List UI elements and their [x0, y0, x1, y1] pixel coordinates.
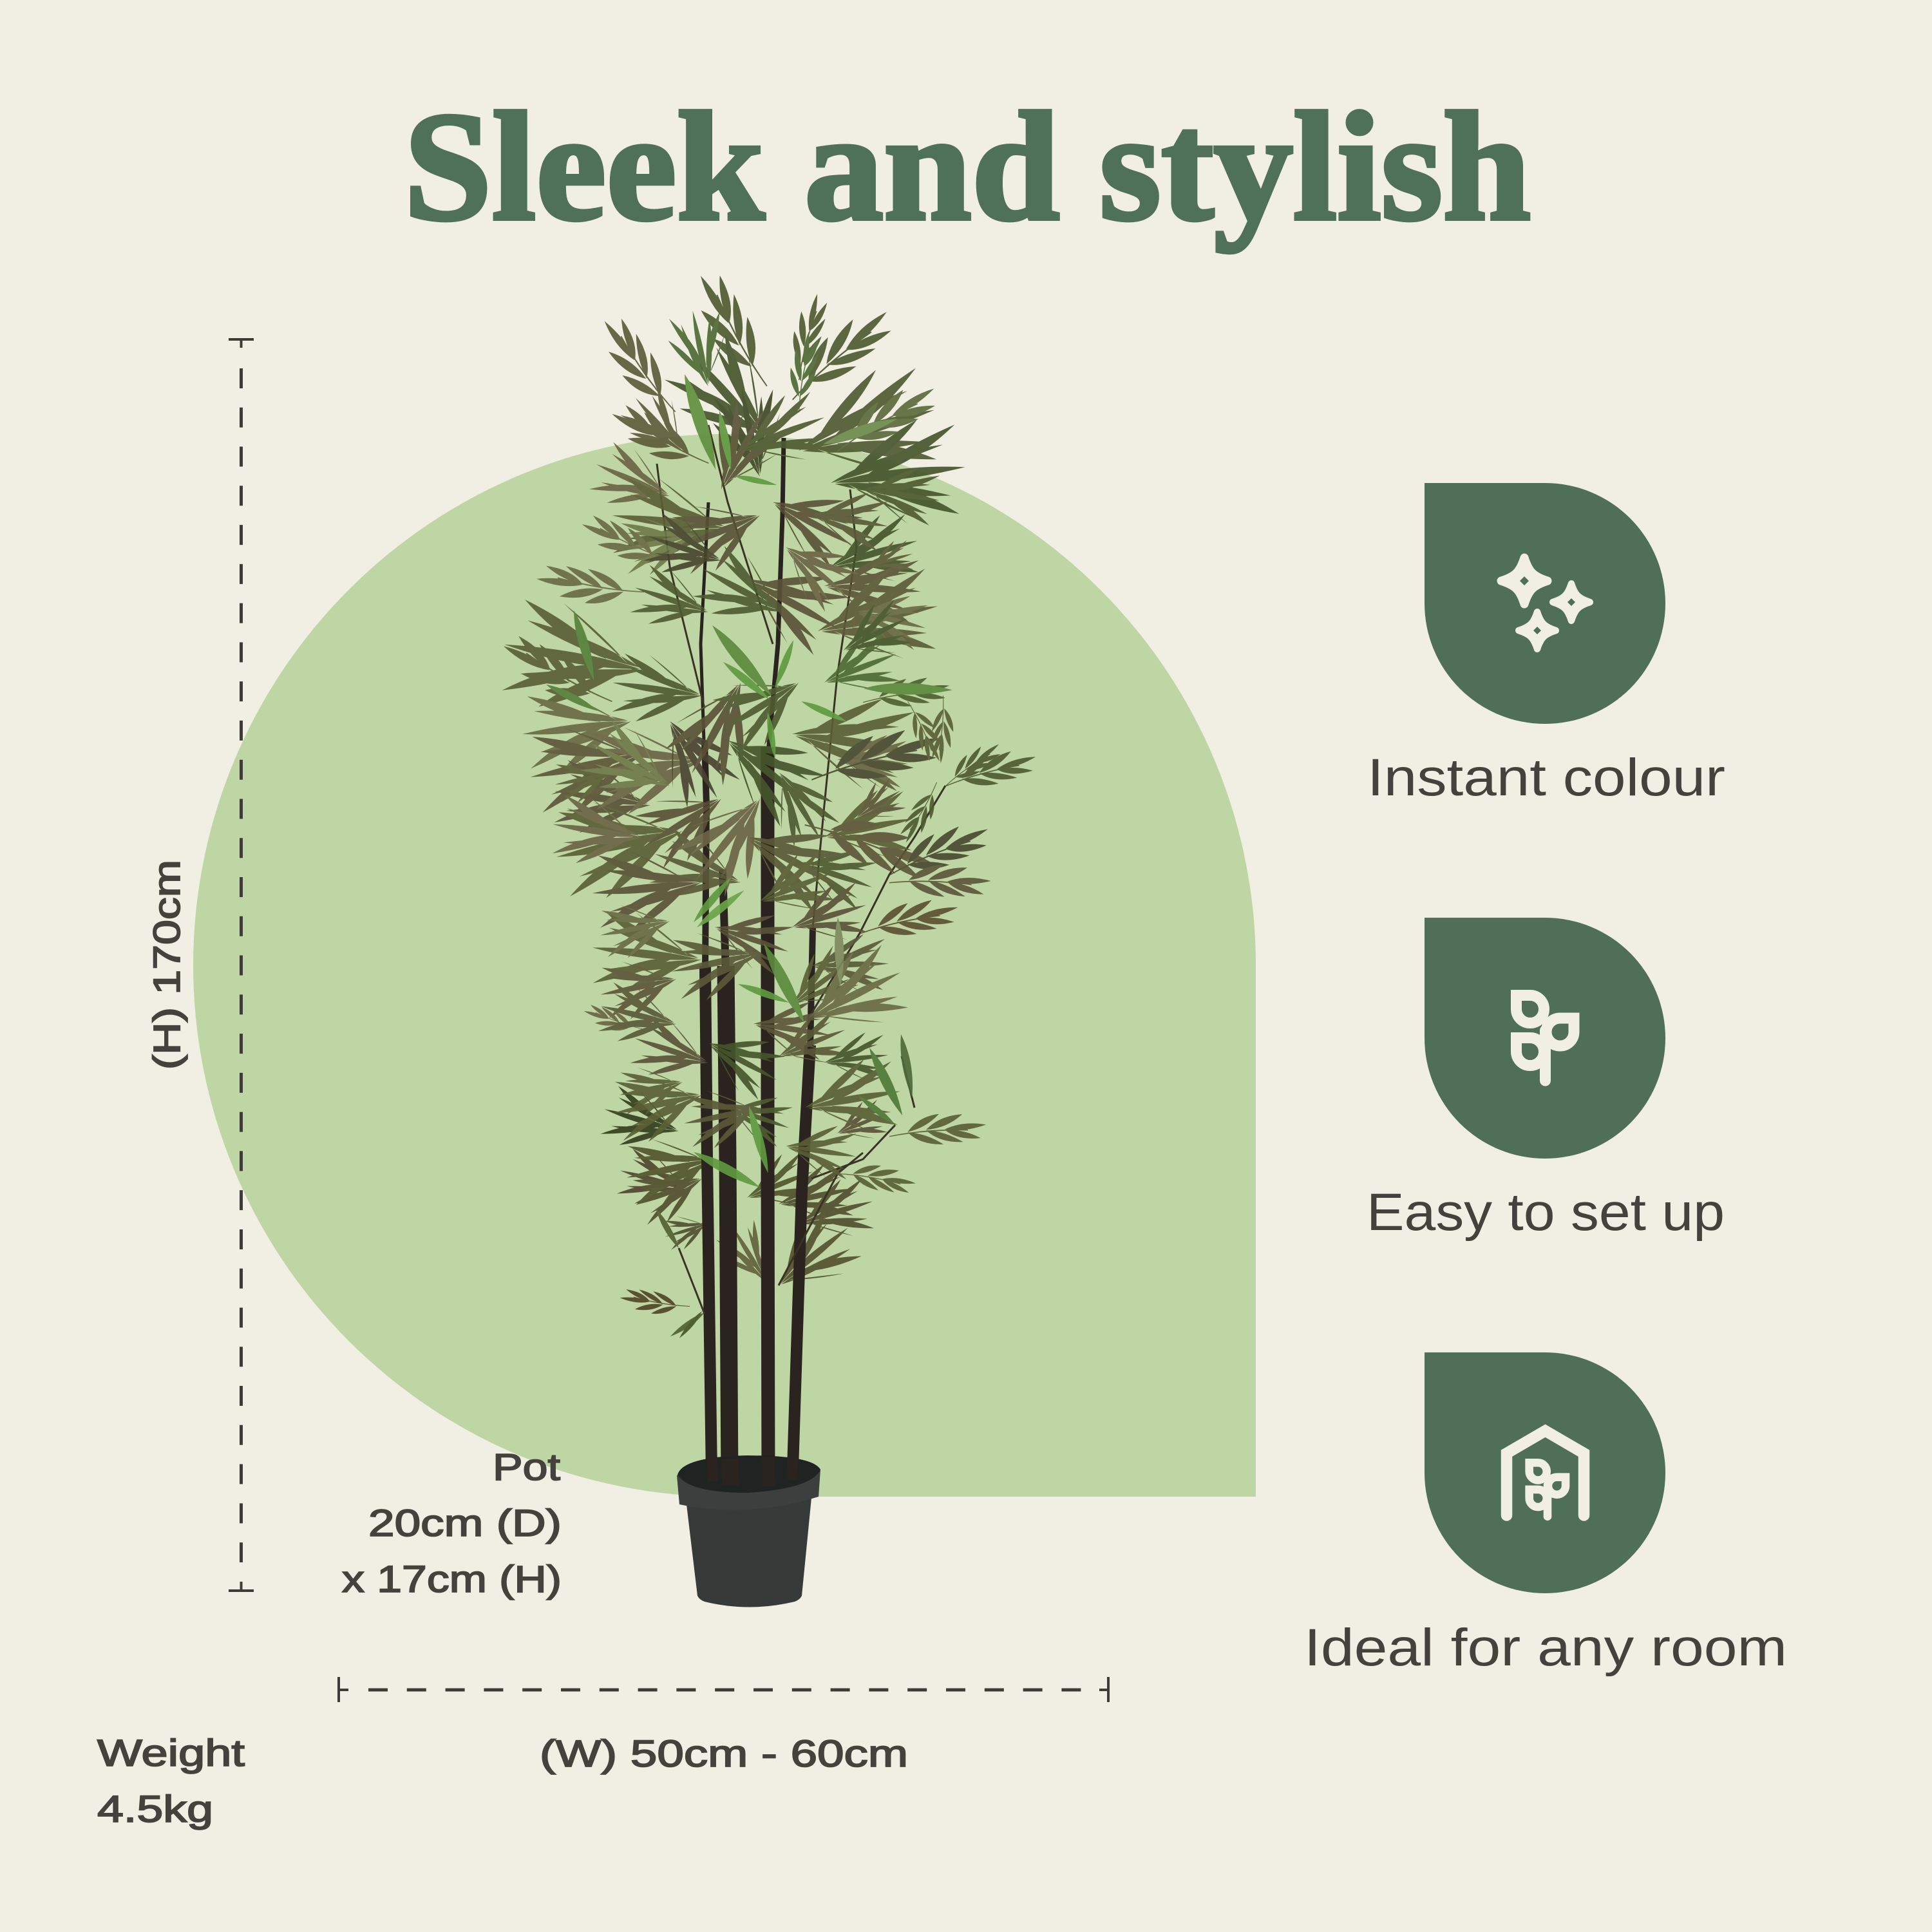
pot dimensions text [342, 1446, 562, 1600]
plant stems [657, 425, 945, 1481]
label: easy to set up: Easy to set up [1367, 1183, 1725, 1242]
feature: instant colour [1367, 483, 1725, 807]
stem bases in pot [706, 1457, 799, 1486]
feature: ideal for any room [1304, 1352, 1787, 1677]
title: Sleek and stylish [404, 80, 1531, 253]
icon badge: sprout [1425, 918, 1665, 1159]
height label: (H) 170cm [146, 860, 188, 1070]
icon badge: house with sprout [1425, 1352, 1665, 1593]
pot [677, 1455, 820, 1607]
feature: easy to set up [1367, 918, 1725, 1242]
weight text [97, 1732, 245, 1830]
label: instant colour: Instant colour [1367, 748, 1725, 807]
icon badge: sparkles [1425, 483, 1665, 724]
pot dimensions text: 20cm (D) [368, 1502, 562, 1544]
pot dimensions text: x 17cm (H) [342, 1558, 562, 1600]
label: ideal for any room: Ideal for any room [1304, 1618, 1787, 1677]
width dimension line [339, 1677, 1108, 1702]
width label: (W) 50cm - 60cm [540, 1733, 908, 1775]
bamboo plant [493, 265, 1040, 1607]
weight text: Weight [97, 1732, 245, 1774]
lower foliage behind stems [596, 1082, 880, 1340]
pot dimensions text: Pot [493, 1446, 560, 1488]
height dimension line [229, 339, 254, 1591]
arch background shape [193, 434, 1256, 1497]
weight text: 4.5kg [97, 1788, 213, 1830]
foliage [493, 265, 1040, 1197]
